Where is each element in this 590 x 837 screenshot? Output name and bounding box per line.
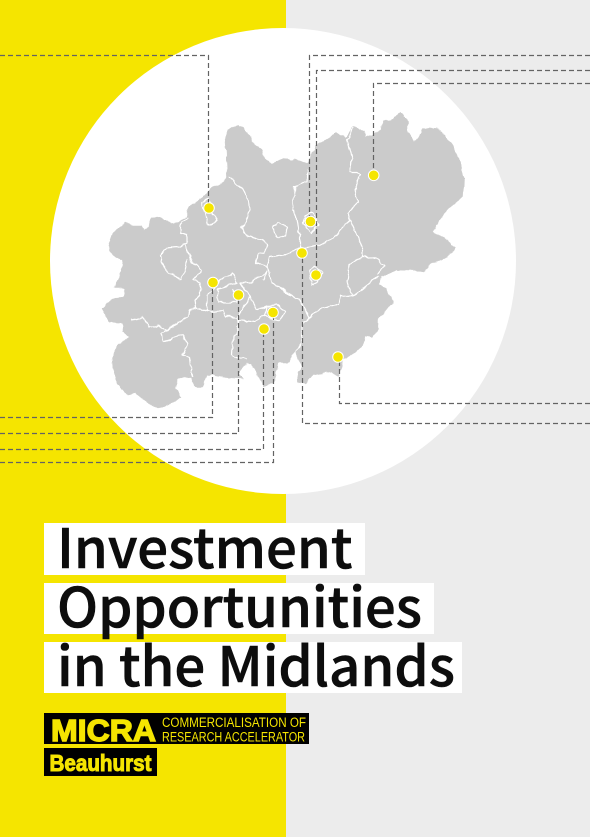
title backgrounds <box>44 523 462 693</box>
title bar 1 <box>44 523 365 575</box>
heading: in the Midlands: in the Midlands <box>57 623 455 702</box>
heading: Opportunities: Opportunities <box>57 564 422 643</box>
title text <box>57 505 455 702</box>
background: grey right half <box>286 0 590 837</box>
location markers <box>204 170 379 362</box>
title bar 3 <box>44 642 462 693</box>
logo: MICRA: MICRA <box>51 713 156 748</box>
map: Midlands regions <box>102 113 464 408</box>
map: internal boundaries <box>132 129 385 377</box>
logos <box>44 713 309 776</box>
heading: Investment: Investment <box>57 505 352 584</box>
title bar 2 <box>44 583 434 634</box>
logo: Beauhurst: Beauhurst <box>50 750 152 776</box>
white circle <box>50 28 516 494</box>
dashed leader lines <box>0 56 590 462</box>
logo: MICRA <box>44 713 309 748</box>
map outline <box>102 113 464 408</box>
